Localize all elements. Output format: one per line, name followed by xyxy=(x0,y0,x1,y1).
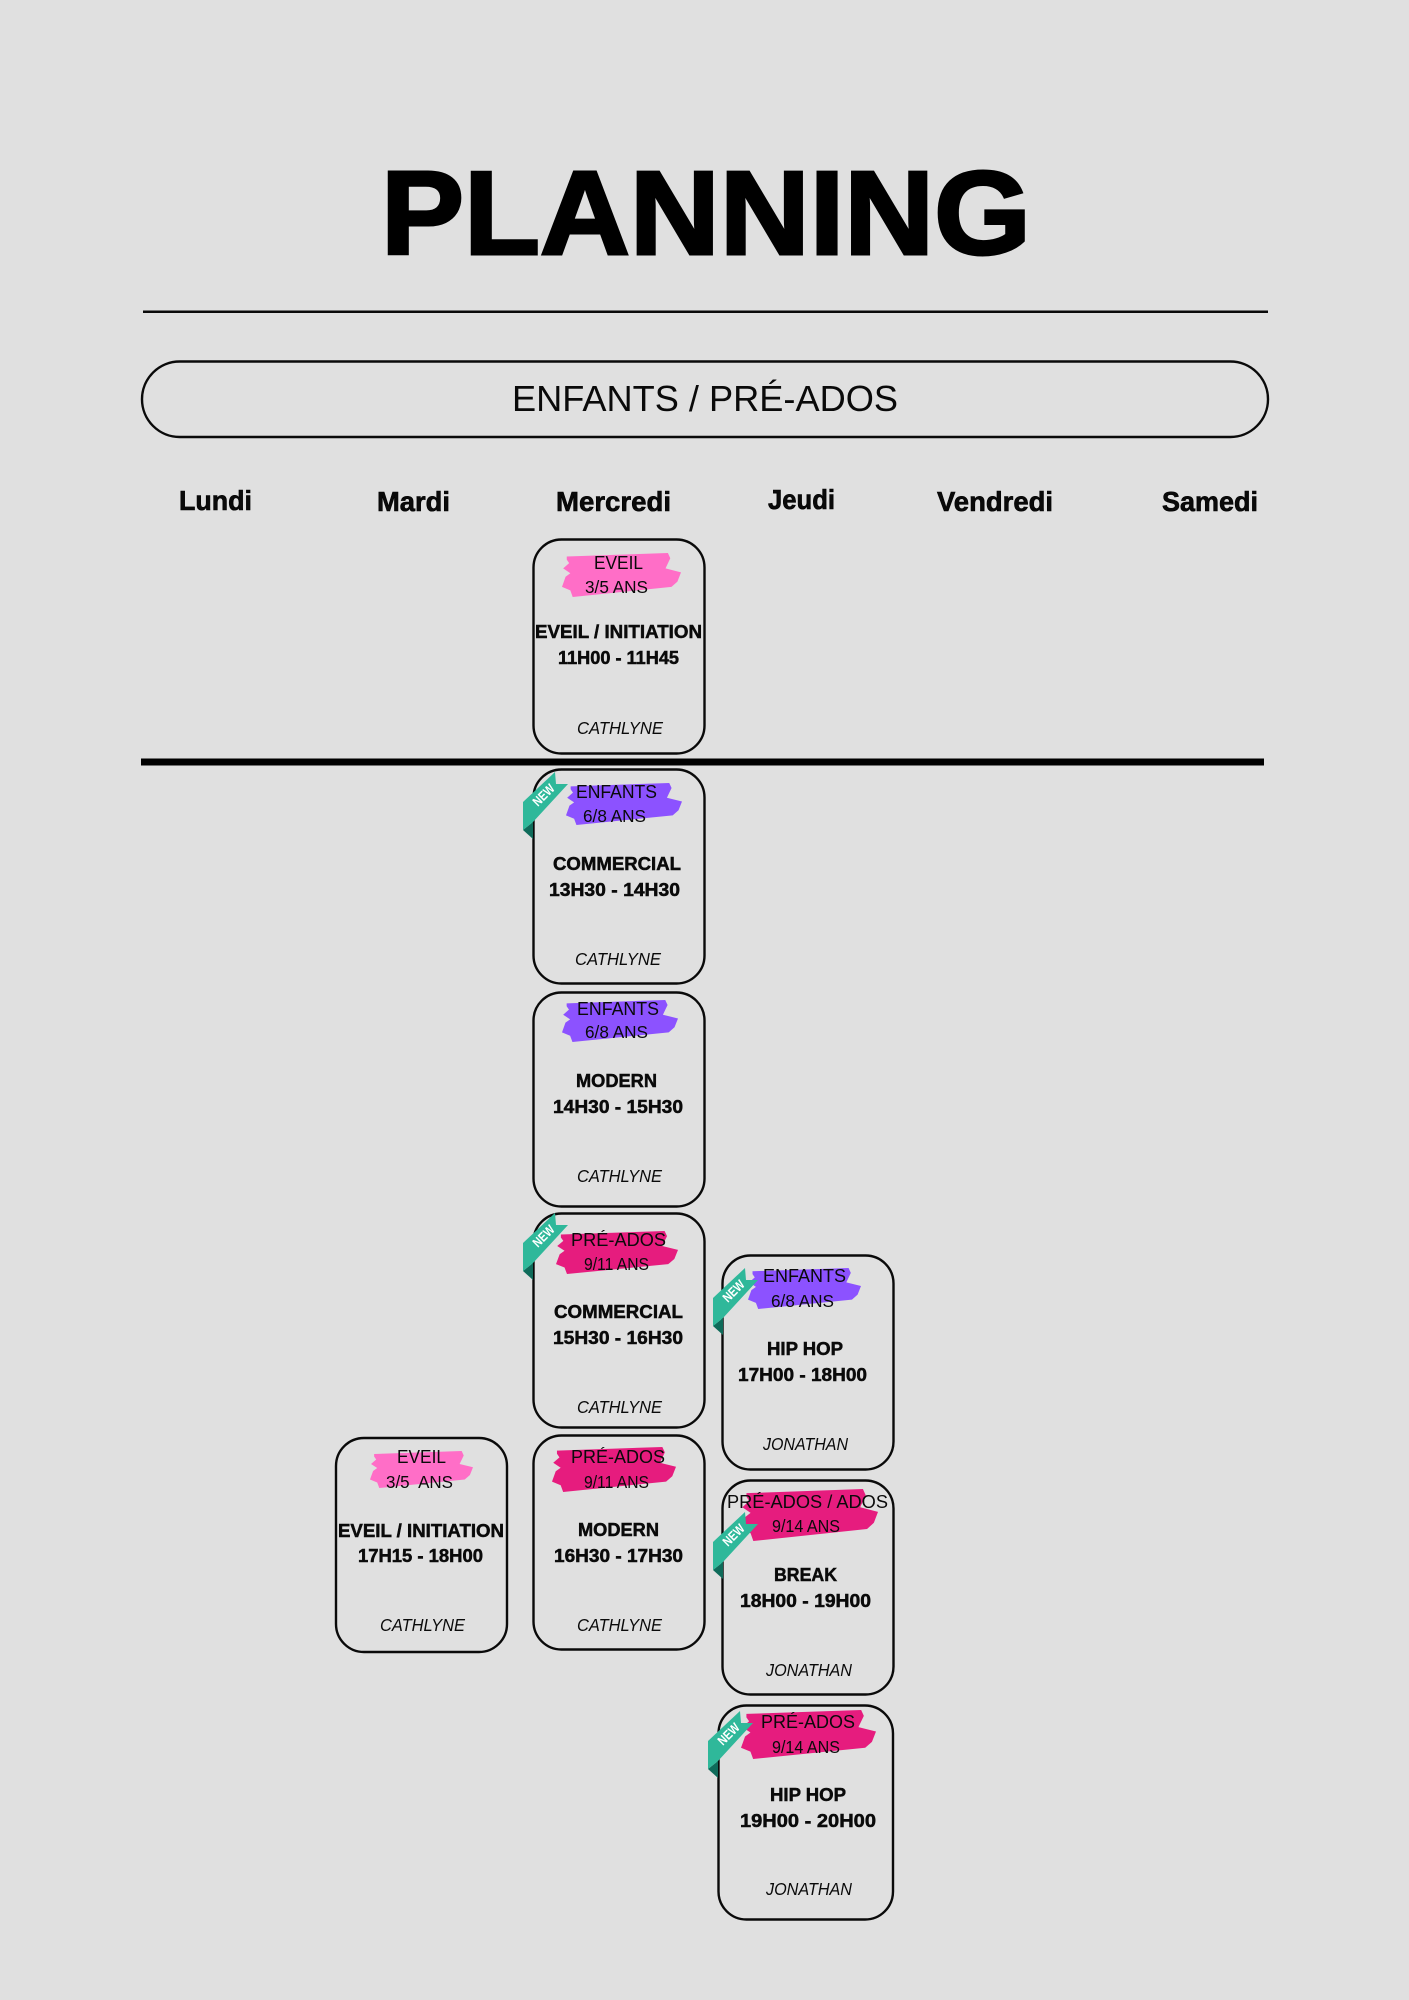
ribbon: new: NEW xyxy=(719,1520,748,1549)
card: jeudi hip hop 19H00: 19H00 - 20H00 xyxy=(740,1810,876,1831)
ribbon: new xyxy=(523,772,568,839)
ribbon: new xyxy=(708,1711,753,1778)
card: mercredi commercial 15H30 xyxy=(523,1213,704,1428)
card: jeudi hip hop 17H00: ENFANTS xyxy=(763,1265,846,1286)
ribbon: new: NEW xyxy=(719,1276,748,1305)
card: jeudi hip hop 17H00: JONATHAN xyxy=(762,1434,848,1454)
card: mardi éveil 17H15: CATHLYNE xyxy=(380,1615,465,1635)
title: PLANNING xyxy=(381,147,1031,280)
card: jeudi hip hop 17H00: HIP HOP xyxy=(767,1338,843,1359)
card: mercredi éveil 11H00 xyxy=(534,540,704,754)
ribbon: new: NEW xyxy=(529,1221,558,1250)
card: jeudi break 18H00: 18H00 - 19H00 xyxy=(740,1590,871,1611)
card: mercredi commercial 15H30: PRÉ-ADOS xyxy=(571,1229,666,1250)
card: mardi éveil 17H15 xyxy=(336,1438,507,1652)
day headers: Samedi xyxy=(1162,486,1258,517)
card: mercredi modern 14H30: 6/8 ANS xyxy=(585,1022,648,1042)
card: jeudi hip hop 19H00: HIP HOP xyxy=(770,1784,846,1805)
card: mercredi modern 16H30: 16H30 - 17H30 xyxy=(554,1545,683,1566)
card: jeudi hip hop 19H00: 9/14 ANS xyxy=(772,1737,840,1757)
banner: enfants / pré-ados: ENFANTS / PRÉ-ADOS xyxy=(512,378,898,419)
card: mercredi modern 14H30: CATHLYNE xyxy=(577,1166,662,1186)
card: mercredi commercial 13H30: COMMERCIAL xyxy=(553,853,681,874)
card: jeudi hip hop 19H00 xyxy=(708,1706,893,1920)
ribbon: new xyxy=(713,1268,758,1335)
card: jeudi hip hop 19H00: PRÉ-ADOS xyxy=(761,1711,855,1732)
card: jeudi break 18H00: PRÉ-ADOS / ADOS xyxy=(727,1491,888,1512)
card: mercredi éveil 11H00: 11H00 - 11H45 xyxy=(558,647,679,668)
card: mercredi modern 16H30: 9/11 ANS xyxy=(584,1472,649,1492)
card: mercredi commercial 13H30: 13H30 - 14H30 xyxy=(549,879,680,900)
card: jeudi break 18H00: BREAK xyxy=(774,1564,838,1585)
day headers xyxy=(179,484,1258,517)
card: mercredi modern 16H30: CATHLYNE xyxy=(577,1615,662,1635)
card: mardi éveil 17H15: EVEIL / INITIATION xyxy=(338,1520,504,1541)
card: mercredi commercial 15H30: 15H30 - 16H30 xyxy=(553,1327,683,1348)
card: jeudi hip hop 19H00: JONATHAN xyxy=(765,1879,852,1899)
card: mercredi modern 16H30: MODERN xyxy=(578,1519,659,1540)
card: jeudi break 18H00: 9/14 ANS xyxy=(772,1516,840,1536)
card: mercredi commercial 15H30: 9/11 ANS xyxy=(584,1254,649,1274)
card: mercredi commercial 13H30: 6/8 ANS xyxy=(583,806,646,826)
card: mercredi modern 16H30: PRÉ-ADOS xyxy=(571,1446,665,1467)
card: mercredi modern 16H30 xyxy=(534,1436,704,1650)
ribbon: new: NEW xyxy=(714,1719,743,1748)
banner: enfants / pré-ados xyxy=(142,362,1268,437)
card: mercredi modern 14H30: ENFANTS xyxy=(577,998,659,1019)
card: mardi éveil 17H15: 17H15 - 18H00 xyxy=(358,1545,483,1566)
card: jeudi break 18H00: JONATHAN xyxy=(765,1660,852,1680)
day headers: Lundi xyxy=(179,485,252,516)
card: mercredi commercial 13H30: CATHLYNE xyxy=(575,949,661,969)
card: mercredi éveil 11H00: CATHLYNE xyxy=(577,718,663,738)
card: mercredi commercial 15H30: COMMERCIAL xyxy=(554,1301,683,1322)
card: mardi éveil 17H15: EVEIL xyxy=(397,1446,446,1467)
card: mardi éveil 17H15: 3/5 ANS xyxy=(386,1472,453,1492)
card: mercredi commercial 13H30: ENFANTS xyxy=(576,781,657,802)
card: mercredi éveil 11H00: 3/5 ANS xyxy=(585,577,648,597)
card: mercredi commercial 15H30: CATHLYNE xyxy=(577,1397,662,1417)
card: jeudi hip hop 17H00: 17H00 - 18H00 xyxy=(738,1364,867,1385)
card: jeudi hip hop 17H00: 6/8 ANS xyxy=(771,1291,834,1311)
card: jeudi hip hop 17H00 xyxy=(713,1256,894,1470)
day headers: Jeudi xyxy=(768,484,835,515)
day headers: Mercredi xyxy=(556,486,671,517)
card: mercredi éveil 11H00: EVEIL xyxy=(594,552,643,573)
card: jeudi break 18H00 xyxy=(713,1480,894,1694)
card: mercredi éveil 11H00: EVEIL / INITIATION xyxy=(535,621,702,642)
card: mercredi modern 14H30: 14H30 - 15H30 xyxy=(553,1096,683,1117)
day headers: Vendredi xyxy=(937,486,1053,517)
ribbon: new xyxy=(523,1213,568,1280)
card: mercredi modern 14H30: MODERN xyxy=(576,1070,657,1091)
ribbon: new: NEW xyxy=(529,780,558,809)
ribbon: new xyxy=(713,1512,758,1579)
card: mercredi modern 14H30 xyxy=(534,992,704,1206)
card: mercredi commercial 13H30 xyxy=(523,770,704,984)
day headers: Mardi xyxy=(377,486,450,517)
